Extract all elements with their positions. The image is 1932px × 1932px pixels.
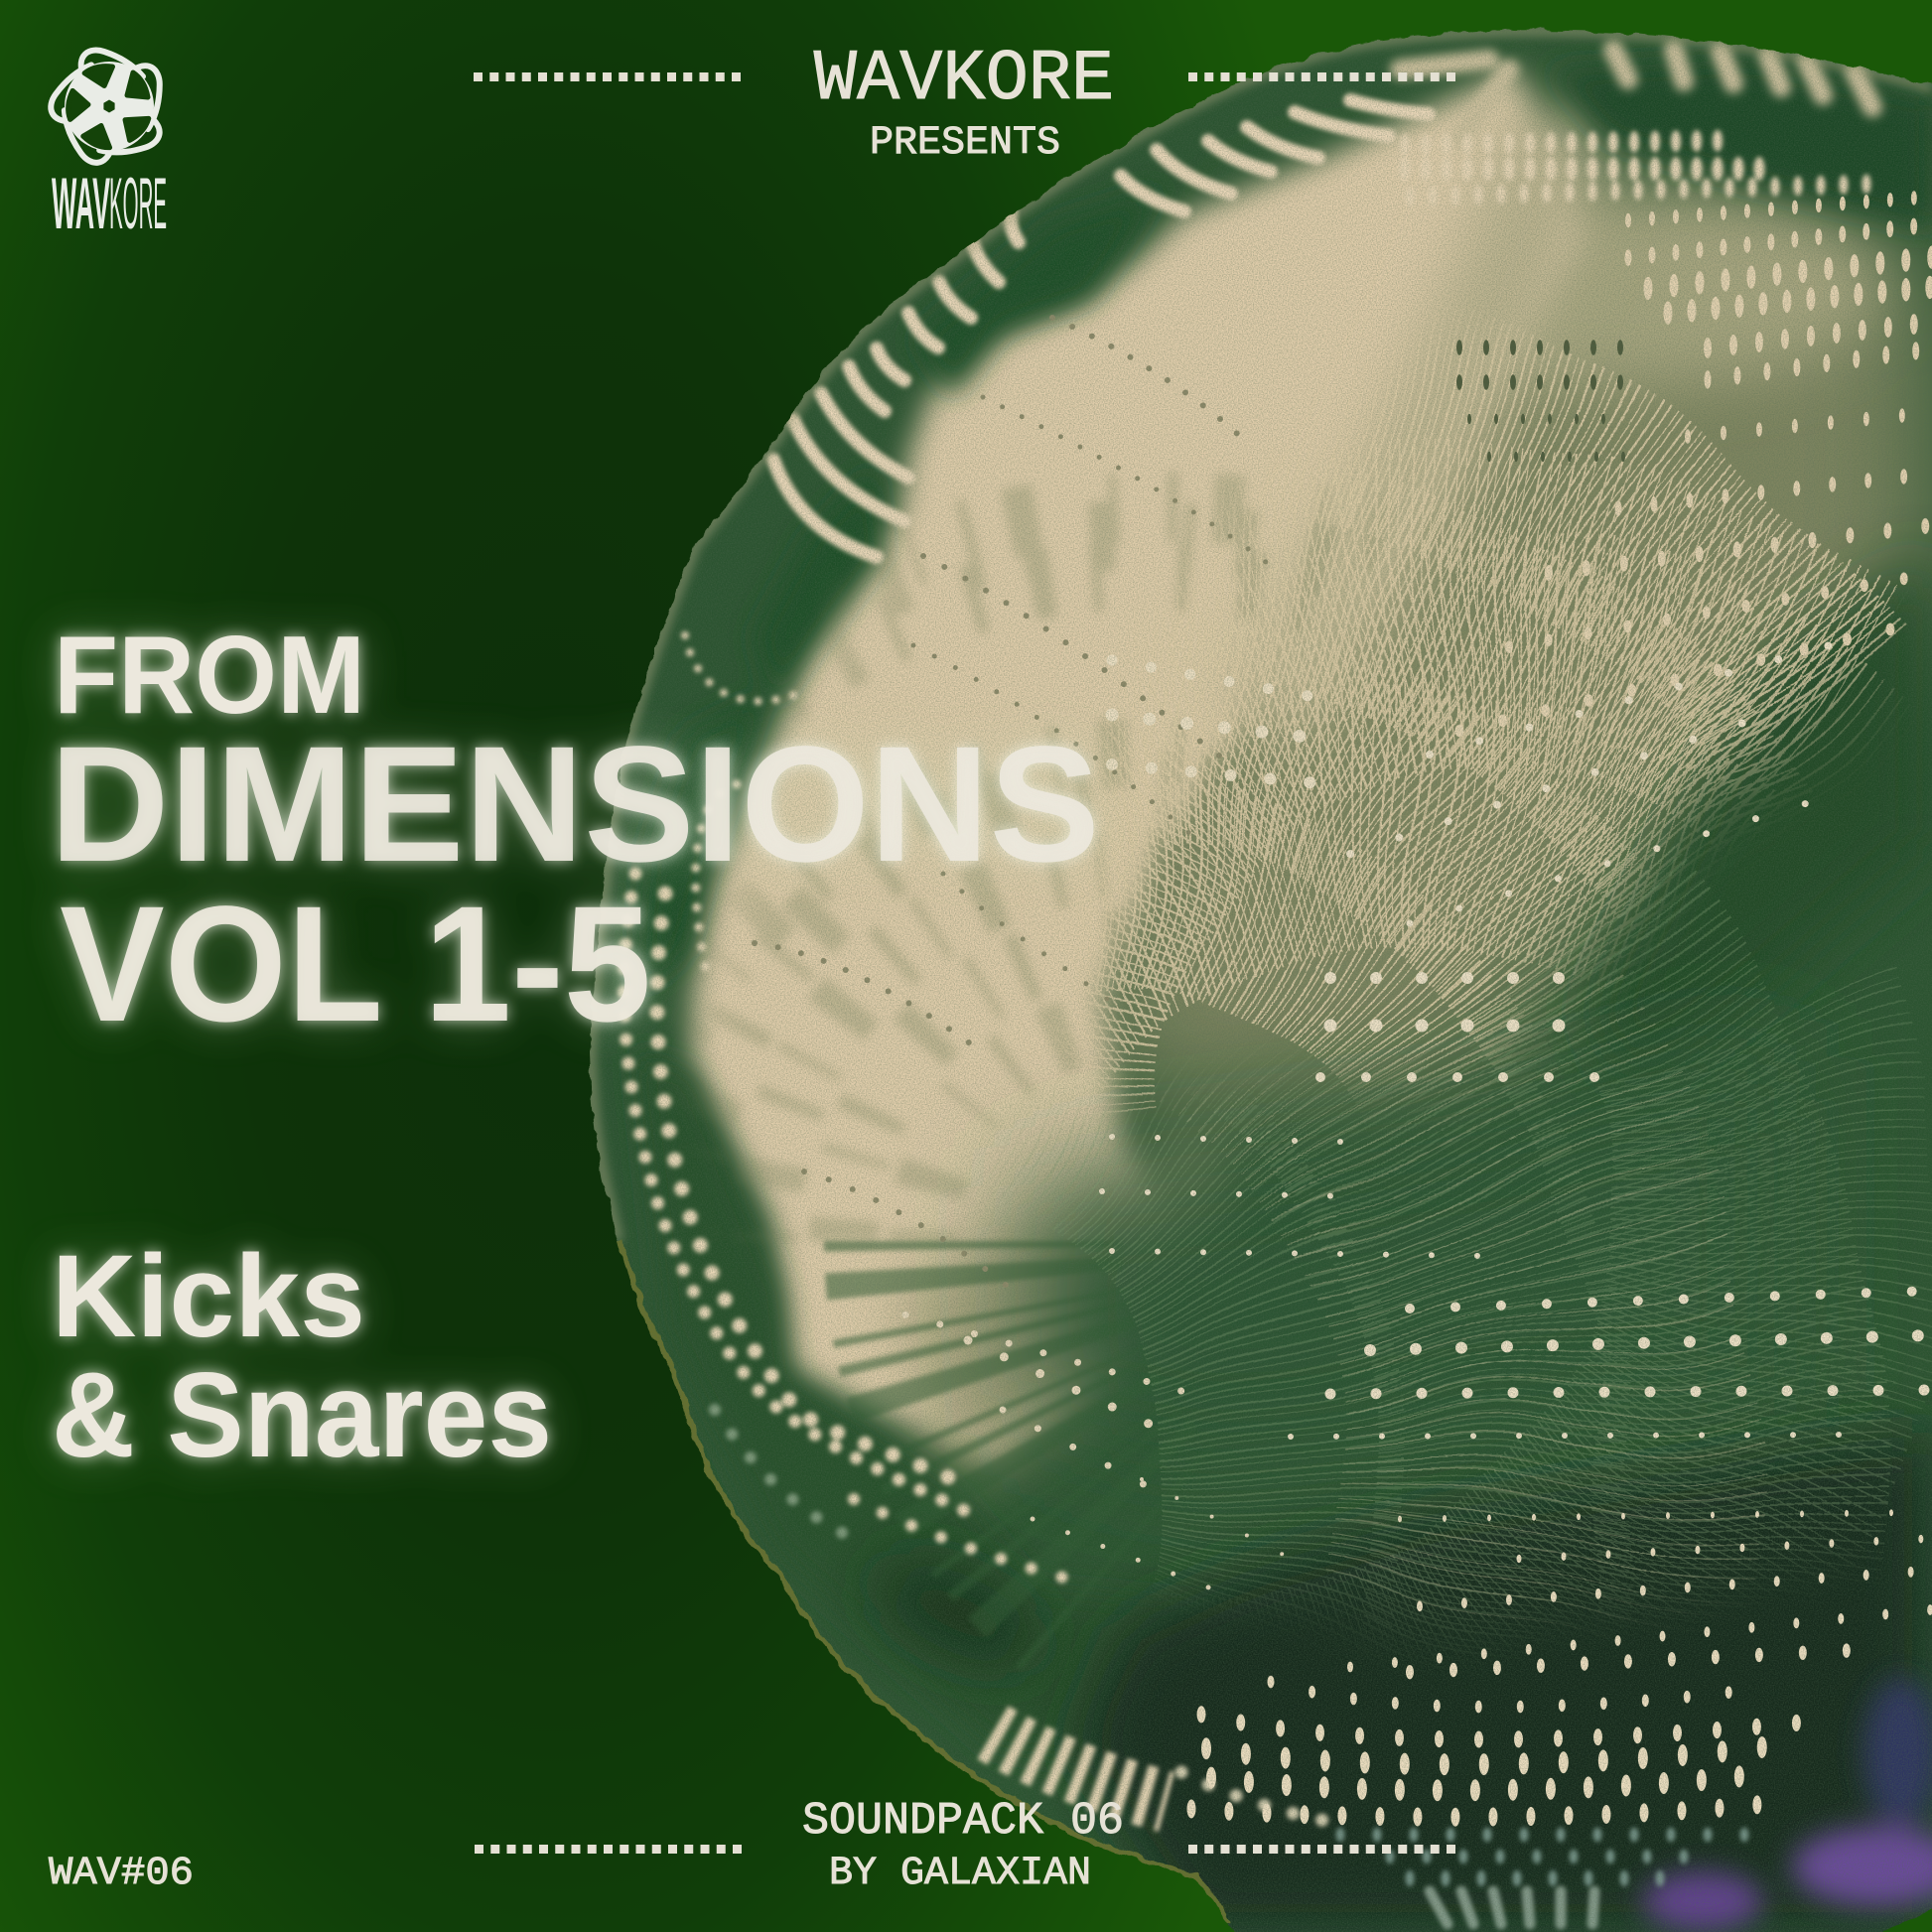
rim crescents top-left [773, 100, 1429, 557]
lower ellipse row [1142, 1479, 1291, 1559]
bright top band dots [1405, 141, 1886, 197]
dot row [1708, 322, 1932, 347]
main title [50, 614, 1100, 1482]
larger cream dots at grass edge [1112, 660, 1330, 784]
dimple row [1489, 455, 1628, 459]
dimple arc [755, 943, 983, 1052]
blob [1459, 69, 1509, 139]
blob [1721, 52, 1733, 83]
hair ring crossing [854, 814, 1787, 1370]
teal dot row [1390, 1853, 1708, 1861]
teal dot row [1340, 1831, 1757, 1839]
mid green lower grass tone [1023, 1052, 1787, 1469]
crescent [971, 238, 999, 282]
blob [1613, 50, 1628, 79]
subtitle Kicks: Kicks [52, 1231, 365, 1362]
sparse dots upper grass [1430, 635, 1866, 755]
purple glow upper [1863, 1678, 1932, 1827]
logo holes [58, 59, 153, 156]
subtitle & Snares: & Snares [52, 1347, 552, 1482]
lower ellipse row [1003, 1410, 1172, 1499]
title VOL 1-5: VOL 1-5 [60, 873, 651, 1056]
top rim blobs [1400, 50, 1872, 139]
teal dots bottom [1340, 1835, 1757, 1878]
title FROM: FROM [54, 614, 365, 737]
streak ring [844, 943, 1440, 1241]
logo hub [103, 99, 115, 113]
logo [48, 51, 173, 244]
crescent [908, 313, 938, 347]
sphere base green [588, 27, 1932, 1932]
elongated dots lower rim [1181, 1772, 1330, 1822]
grid row [1206, 1744, 1787, 1764]
blob [1807, 62, 1823, 95]
crescent [1121, 176, 1184, 211]
green streaks lower left [973, 1241, 1122, 1561]
dimple arc [804, 1172, 1013, 1291]
dotted rule top left [474, 72, 741, 81]
dark rim blotches [635, 189, 1162, 993]
dot row [1668, 287, 1932, 313]
vertical bars row 1 [1405, 141, 1727, 145]
sparse dots upper grass [1350, 715, 1767, 854]
cream edge blend [1281, 159, 1549, 685]
beads along lower-left rim [624, 635, 1067, 1579]
blob [1674, 50, 1684, 81]
purple glow [1643, 1678, 1932, 1931]
grass dot row [1112, 1137, 1340, 1142]
streak ring [923, 1023, 1360, 1241]
crescent [1295, 112, 1389, 136]
bar [1527, 1891, 1530, 1924]
purple glow right [1792, 1827, 1932, 1906]
logo wordmark: WAV [52, 164, 110, 244]
logo disc [65, 62, 154, 151]
crescent [1350, 100, 1429, 114]
footer artist: BY GALAXIAN [829, 1852, 1091, 1896]
upper-right grass mix tone [1072, 228, 1932, 1122]
olive rim edge [618, 1241, 1226, 1924]
catalog number: WAV#06 [49, 1852, 194, 1896]
streak ring [645, 754, 1678, 1241]
radial bars lower rim [993, 1732, 1167, 1802]
streak ring [635, 576, 1759, 1241]
lower ellipse row [968, 1340, 1162, 1430]
grid row [1211, 1773, 1767, 1790]
edge dot row [1112, 715, 1330, 740]
crescent [1247, 127, 1318, 158]
footer soundpack: SOUNDPACK 06 [802, 1796, 1124, 1847]
dimple arc [1052, 318, 1251, 447]
green hair ring [1271, 691, 1747, 1833]
poster: KORE [109, 164, 167, 244]
dot row [1549, 525, 1932, 573]
dimple arc [913, 645, 1201, 844]
header subtitle: PRESENTS [870, 121, 1060, 166]
bead chain inner [657, 894, 953, 1479]
grass dot row [1330, 1019, 1598, 1033]
dot row [1688, 413, 1932, 437]
dark top cap [1549, 60, 1932, 228]
bead chain top [685, 635, 794, 701]
bead chain upper [696, 784, 737, 973]
lower left grid dots [905, 1286, 1291, 1588]
dark lower-left rim band [635, 1052, 1231, 1767]
bottom vertical bars [1430, 1891, 1594, 1924]
blob [1768, 56, 1781, 87]
blob [1400, 60, 1489, 69]
dot row [1459, 620, 1932, 731]
hair ring [695, 547, 1787, 1000]
grid row [1420, 1571, 1932, 1606]
crescent [849, 366, 885, 411]
lower ellipse row [1033, 1519, 1211, 1588]
grass dot row [1330, 1390, 1932, 1394]
green hair ring [1122, 1032, 1777, 1767]
dark dimples center top [1459, 347, 1628, 457]
teal dot row [1410, 1874, 1668, 1882]
shadow shoulder [861, 1540, 1055, 1687]
crescent [773, 460, 877, 557]
grass dot row [1102, 1191, 1350, 1196]
bar [1555, 1891, 1567, 1924]
hair ring [586, 725, 1658, 1261]
title DIMENSIONS: DIMENSIONS [50, 713, 1100, 897]
logo icon [48, 51, 173, 172]
crescent [939, 282, 971, 318]
grid row [1400, 1512, 1932, 1519]
vertical bars row 3 [1410, 184, 1886, 197]
hair ring [824, 367, 1817, 699]
dot row [1618, 474, 1932, 508]
pale grey top-right wash [1370, 189, 1886, 387]
header title: WAVKORE [814, 39, 1114, 120]
sphere image [588, 27, 1932, 1932]
lower ellipse row [905, 1286, 1193, 1424]
grid row [1191, 1805, 1757, 1817]
dimple row [1459, 345, 1628, 350]
bead chain third [854, 1499, 1067, 1579]
dotted rule top right [1188, 72, 1455, 81]
bead chain outer [624, 874, 983, 1519]
green hair ring [874, 1052, 1291, 1647]
dimple arc [943, 874, 1112, 1003]
crescent [821, 393, 908, 478]
crescent [877, 348, 904, 380]
grid row [1519, 1539, 1932, 1559]
crescent [1208, 141, 1271, 172]
grass dot row [1112, 1251, 1489, 1256]
lower cream-green blend [894, 1132, 1231, 1489]
vertical bars row 2 [1405, 163, 1767, 175]
grass dot row [1410, 1291, 1932, 1309]
dot row [1628, 224, 1932, 258]
cream surface [692, 69, 1579, 1461]
grass hairs [586, 367, 1837, 1833]
dot row [1628, 197, 1932, 220]
streak ring [774, 507, 1787, 814]
dotted rule bottom right [1188, 1845, 1455, 1854]
crescent [1157, 150, 1231, 194]
green hair ring [1092, 873, 1509, 1690]
dimple row [1459, 379, 1628, 385]
grass dot row [1320, 1072, 1608, 1082]
grass dot row [1370, 1335, 1932, 1350]
dotted rule bottom left [475, 1845, 742, 1854]
dimple arc [983, 397, 1271, 566]
grid row [1350, 1609, 1932, 1667]
crescent [793, 420, 904, 521]
hair ring [745, 884, 1499, 1261]
grid row [1271, 1682, 1757, 1707]
dot row [1708, 348, 1932, 379]
edge dot row [1112, 764, 1330, 784]
dark lower body [1072, 1430, 1932, 1932]
streak ring [695, 536, 1787, 983]
streak ring [764, 864, 1519, 1241]
sparse dots upper grass [1410, 794, 1837, 923]
grass dot row [1330, 972, 1579, 984]
dimple arc [923, 556, 1231, 764]
bar [1430, 1891, 1448, 1924]
pale hairs in green [1052, 793, 1549, 1624]
dim beads near rim [715, 1410, 854, 1539]
dot row [1648, 257, 1932, 288]
hair ring crossing [913, 576, 1837, 751]
dots bottom grid [1191, 1512, 1932, 1817]
cream hairs [586, 367, 1837, 1370]
blob [1855, 71, 1872, 107]
bar [1461, 1891, 1473, 1924]
grass dot row [1291, 1435, 1847, 1437]
logo loops [48, 51, 173, 172]
hair ring crossing [1042, 645, 1837, 1092]
grid row [1410, 1651, 1847, 1672]
bar [1493, 1891, 1501, 1924]
deep green top-right grass [1588, 556, 1932, 1092]
streak shading on cream [635, 507, 1787, 1241]
dimple dots on cream [755, 318, 1271, 1291]
green hairs [874, 691, 1777, 1833]
crescent [1011, 211, 1019, 242]
purple glow left [1643, 1871, 1762, 1931]
pale rim haze [590, 31, 1932, 1241]
dot row [1509, 574, 1932, 647]
pale hair ring [1052, 793, 1549, 1624]
edge dot row [1112, 660, 1330, 700]
dots upper right [1459, 197, 1932, 731]
streak ring [685, 784, 1598, 1241]
dimple row [1469, 417, 1628, 421]
grass cream dots [1102, 635, 1932, 1437]
grid row [1201, 1715, 1807, 1739]
bar [1592, 1891, 1594, 1924]
